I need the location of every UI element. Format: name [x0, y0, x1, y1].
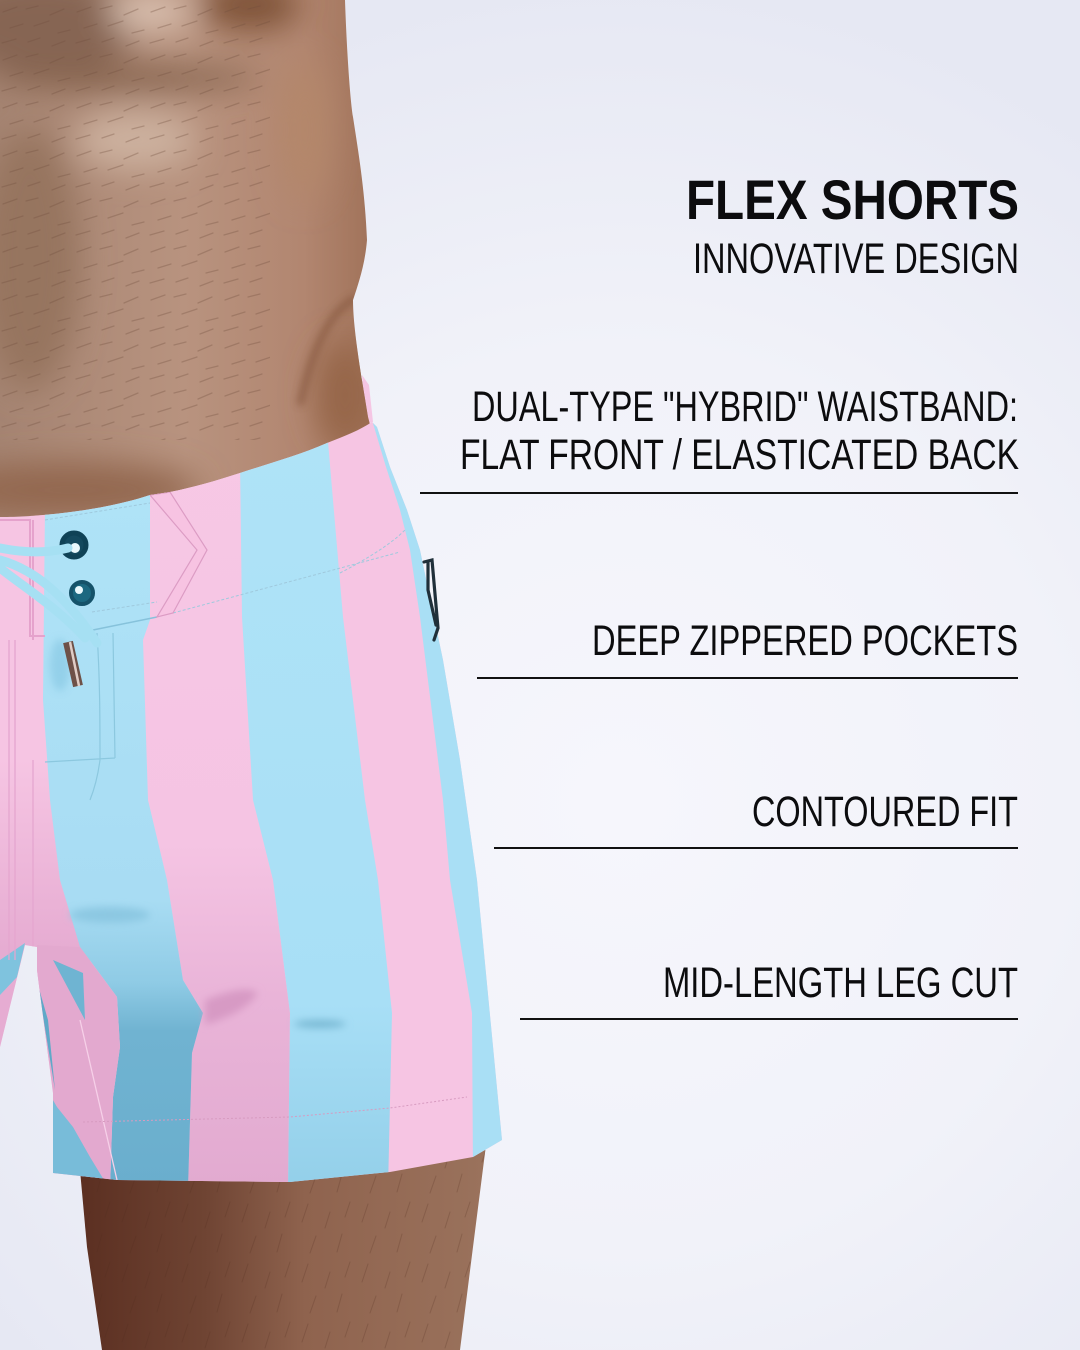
blue stripe: center — [240, 430, 392, 1190]
fly seams — [9, 640, 33, 960]
waistband stitching — [45, 503, 405, 613]
fabric folds — [70, 907, 346, 1028]
base pink fabric — [0, 400, 520, 1200]
title block — [686, 168, 1019, 283]
rear waistband peek — [362, 375, 373, 424]
hem stitch — [83, 1097, 467, 1122]
pink stripe: left panel — [0, 822, 80, 1060]
pink stripe: front panel — [143, 460, 290, 1190]
thigh — [80, 1145, 486, 1350]
flank crease — [300, 298, 356, 405]
lower inner leg blue — [53, 1100, 103, 1178]
shorts — [0, 400, 520, 1200]
waistband lower edge — [93, 617, 157, 630]
torso — [0, 0, 380, 540]
feature: waistband — [420, 383, 1019, 494]
title: FLEX SHORTS — [686, 168, 1019, 231]
belt loop — [0, 520, 45, 640]
far leg blue — [0, 943, 25, 995]
body hair — [0, 0, 270, 440]
pocket seams — [45, 633, 115, 800]
inner edge sliver — [40, 990, 55, 1090]
waistband chevron tab — [150, 492, 207, 617]
drawstring aglet — [68, 642, 79, 686]
inner leg blue patch — [53, 960, 85, 1020]
aglet shadow — [50, 639, 70, 691]
blue stripe: front left — [43, 488, 203, 1190]
eyelets — [62, 533, 93, 604]
blue stripe: side — [372, 420, 510, 1175]
photo: model torso and shorts — [0, 0, 520, 1350]
side zipper — [424, 560, 438, 640]
drawstring — [0, 548, 97, 643]
inseam — [80, 1020, 117, 1180]
inner leg pink — [37, 945, 120, 1190]
